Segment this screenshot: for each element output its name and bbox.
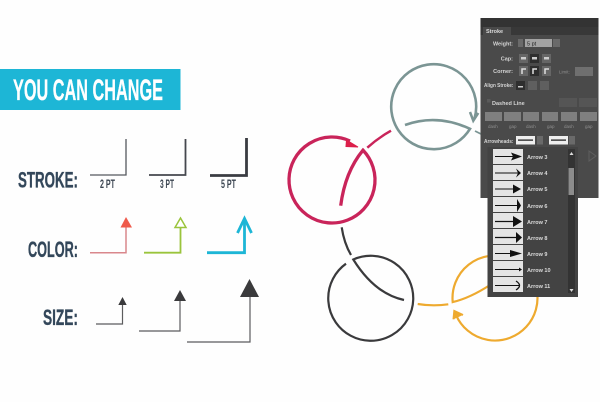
- arrowhead selectors: [516, 136, 575, 144]
- arrow: red: [90, 217, 132, 253]
- scrollbar track: [568, 149, 575, 293]
- cap buttons: [519, 54, 551, 63]
- heading: color: COLOR:: [28, 237, 78, 262]
- weight label: Weight:: [493, 42, 513, 48]
- diagram: orange circle: [418, 256, 538, 341]
- row 3: [493, 149, 547, 164]
- row 5: [493, 181, 547, 196]
- label: 5 pt: 5 PT: [221, 179, 236, 191]
- corner: 5 pt: [210, 138, 246, 176]
- limit label: Limit:: [559, 70, 570, 74]
- row 9: Arrow 9: [527, 252, 547, 258]
- scrollbar thumb: [568, 168, 574, 195]
- row 4: [493, 165, 548, 180]
- dash and gap fields: dash: [526, 124, 536, 129]
- row 4: Arrow 4: [527, 171, 548, 177]
- row 10: Arrow 10: [527, 268, 551, 274]
- label: 2 pt: 2 PT: [100, 179, 115, 191]
- row: color: [28, 217, 252, 262]
- row 11: Arrow 11: [527, 284, 550, 290]
- dash and gap fields: gap: [585, 124, 593, 129]
- dash and gap fields: dash: [488, 124, 498, 129]
- row 7: Arrow 7: [527, 220, 547, 226]
- row 7: [493, 213, 547, 228]
- tab label: Stroke: [486, 29, 503, 35]
- arrow: green hollow: [144, 218, 186, 253]
- row 10: [493, 261, 551, 276]
- corner: 2 pt: [90, 139, 126, 175]
- row 11: [493, 277, 550, 292]
- row 3: Arrow 3: [527, 155, 547, 161]
- label: 3 pt: 3 PT: [160, 179, 174, 191]
- limit field: [575, 67, 593, 76]
- arrow: large: [187, 279, 259, 342]
- banner: you can change: [0, 69, 180, 110]
- row 6: [493, 197, 547, 212]
- dash and gap fields: dash: [564, 124, 574, 129]
- weight field: [525, 39, 552, 47]
- diagram: black circle: [328, 227, 413, 341]
- cap label: Cap:: [501, 56, 513, 62]
- row 9: [493, 245, 547, 260]
- panel title bar: [480, 18, 598, 27]
- align stroke label: Align Stroke:: [484, 83, 514, 89]
- heading: size: SIZE:: [43, 305, 78, 330]
- tab: stroke: [483, 27, 511, 35]
- corner: 3 pt: [149, 139, 186, 175]
- dash and gap fields: gap: [547, 124, 555, 129]
- arrow list: [488, 147, 578, 297]
- weight spinner: [518, 39, 523, 47]
- arrow: medium: [139, 290, 186, 331]
- arrowheads label: Arrowheads:: [484, 139, 514, 145]
- heading: stroke: STROKE:: [18, 168, 78, 192]
- banner: you can change: YOU CAN CHANGE: [13, 74, 163, 107]
- tab bar: [480, 27, 598, 35]
- arrow: small: [96, 297, 127, 324]
- row 8: [493, 229, 547, 244]
- corner buttons: [519, 66, 551, 76]
- diagram: grey circle: [391, 64, 481, 149]
- row 6: Arrow 6: [527, 204, 547, 210]
- row 5: Arrow 5: [527, 187, 547, 193]
- panel body: [480, 18, 598, 198]
- list background: [488, 147, 578, 297]
- dash and gap fields: gap: [509, 124, 517, 129]
- dash and gap fields: [485, 112, 597, 129]
- dashed line label: Dashed Line: [492, 101, 525, 107]
- side icons: [589, 151, 596, 161]
- row: stroke: [18, 138, 246, 192]
- dashed line checkbox: [487, 99, 490, 102]
- row: size: [43, 279, 259, 342]
- weight value: 5 pt: [527, 42, 537, 48]
- weight dropdown: [553, 39, 560, 47]
- scroll down arrow: [570, 289, 574, 292]
- row 8: Arrow 8: [527, 236, 547, 242]
- align buttons: [516, 81, 549, 90]
- corner label: Corner:: [493, 69, 513, 75]
- dash option buttons: [559, 98, 597, 107]
- diagram: red circle: [289, 131, 391, 223]
- arrow: cyan open: [207, 218, 252, 253]
- scroll up arrow: [570, 152, 574, 155]
- panel: stroke palette: [480, 18, 598, 297]
